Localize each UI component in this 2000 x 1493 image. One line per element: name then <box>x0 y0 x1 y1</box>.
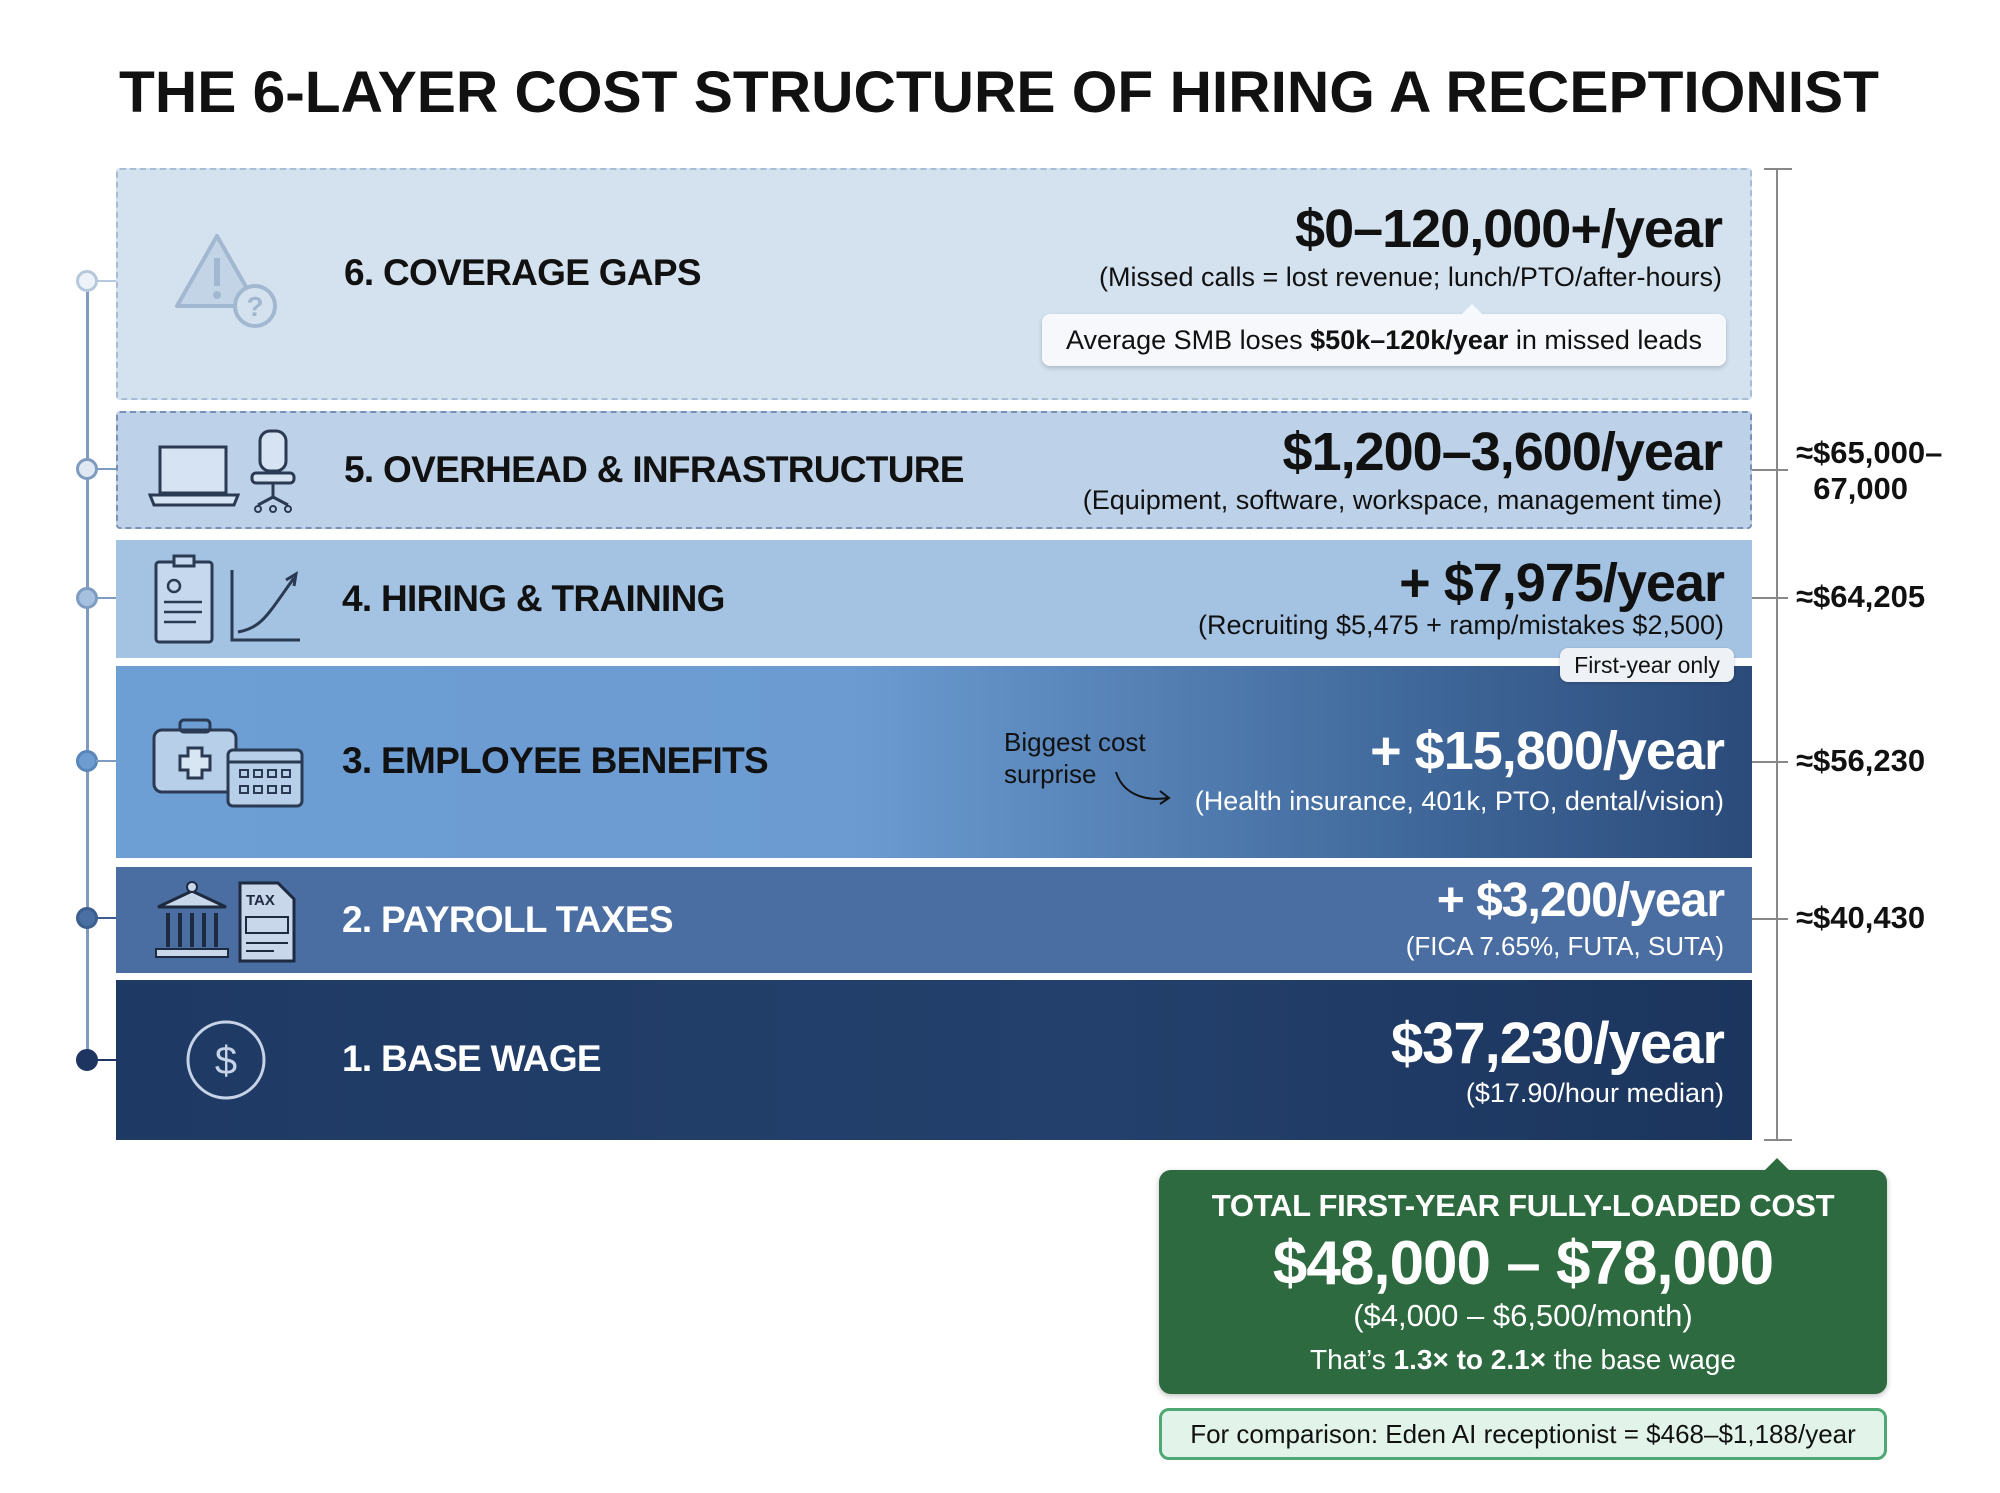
icon: dollar circle: $ <box>215 1039 237 1083</box>
comparison note: For comparison: Eden AI receptionist = $468–$1,188/year <box>1190 1419 1856 1449</box>
annotation: biggest cost surprise <box>1004 727 1171 805</box>
layer 1: base wage <box>116 980 1752 1140</box>
label: 2. PAYROLL TAXES <box>342 899 673 940</box>
tag: first-year only: First-year only <box>1574 652 1720 678</box>
callout <box>1042 314 1726 366</box>
bracket <box>1764 168 1792 1141</box>
layer 2: payroll taxes <box>116 867 1752 973</box>
annotation: biggest cost surprise: Biggest cost <box>1004 727 1146 757</box>
tag: first-year only <box>1560 648 1734 682</box>
layer 4: hiring & training: (Recruiting $5,475 + ramp/mistakes $2,500) <box>1198 610 1724 640</box>
layer 1: base wage: ($17.90/hour median) <box>1466 1078 1724 1108</box>
comparison note <box>1159 1408 1887 1460</box>
total callout: ($4,000 – $6,500/month) <box>1353 1298 1693 1333</box>
cost: $0–120,000+/year <box>1295 199 1722 259</box>
annotation: biggest cost surprise: surprise <box>1004 759 1096 789</box>
icon: clipboard & chart <box>154 554 300 644</box>
label: 4. HIRING & TRAINING <box>342 578 725 619</box>
icon: warning: ? <box>246 291 264 322</box>
icon: laptop & chair <box>148 430 296 513</box>
layer 5: overhead <box>116 411 1752 529</box>
cost: $37,230/year <box>1391 1011 1724 1076</box>
cumulative totals <box>1752 435 1942 935</box>
layer 6: coverage gaps: (Missed calls = lost revenue; lunch/PTO/after-hours) <box>1099 262 1722 292</box>
cumulative totals: ≈$65,000– <box>1796 435 1942 470</box>
total callout <box>1159 1170 1887 1394</box>
icon: warning <box>175 234 277 328</box>
cost: + $15,800/year <box>1370 721 1724 781</box>
label: 3. EMPLOYEE BENEFITS <box>342 740 768 781</box>
layer 2: payroll taxes: (FICA 7.65%, FUTA, SUTA) <box>1406 931 1724 961</box>
layer 3: benefits <box>116 666 1752 858</box>
timeline <box>76 270 116 1071</box>
total callout: That’s 1.3× to 2.1× the base wage <box>1310 1344 1736 1375</box>
layer 4: hiring & training <box>116 540 1752 658</box>
layer 3: benefits: (Health insurance, 401k, PTO, dental/vision) <box>1195 786 1724 816</box>
total callout: $48,000 – $78,000 <box>1273 1229 1773 1298</box>
layer 6: coverage gaps <box>116 168 1752 400</box>
total callout: TOTAL FIRST-YEAR FULLY-LOADED COST <box>1212 1188 1834 1223</box>
cumulative totals: 67,000 <box>1813 471 1908 506</box>
callout: Average SMB loses $50k–120k/year in missed leads <box>1066 325 1702 355</box>
layer 5: overhead: (Equipment, software, workspace, management time) <box>1083 485 1722 515</box>
cost: $1,200–3,600/year <box>1283 422 1722 482</box>
icon: government & tax form: TAX <box>246 892 275 909</box>
label: 5. OVERHEAD & INFRASTRUCTURE <box>344 449 964 490</box>
label: 6. COVERAGE GAPS <box>344 252 701 293</box>
cost: + $7,975/year <box>1399 553 1724 613</box>
cumulative totals: ≈$56,230 <box>1796 743 1925 778</box>
icon: medical kit & calendar <box>152 718 304 808</box>
title: THE 6-LAYER COST STRUCTURE OF HIRING A RECEPTIONIST <box>119 60 1879 125</box>
icon: government & tax form <box>155 881 296 962</box>
icon: dollar circle <box>186 1020 266 1100</box>
cost: + $3,200/year <box>1437 874 1724 927</box>
label: 1. BASE WAGE <box>342 1038 601 1079</box>
cumulative totals: ≈$40,430 <box>1796 900 1925 935</box>
cumulative totals: ≈$64,205 <box>1796 579 1925 614</box>
